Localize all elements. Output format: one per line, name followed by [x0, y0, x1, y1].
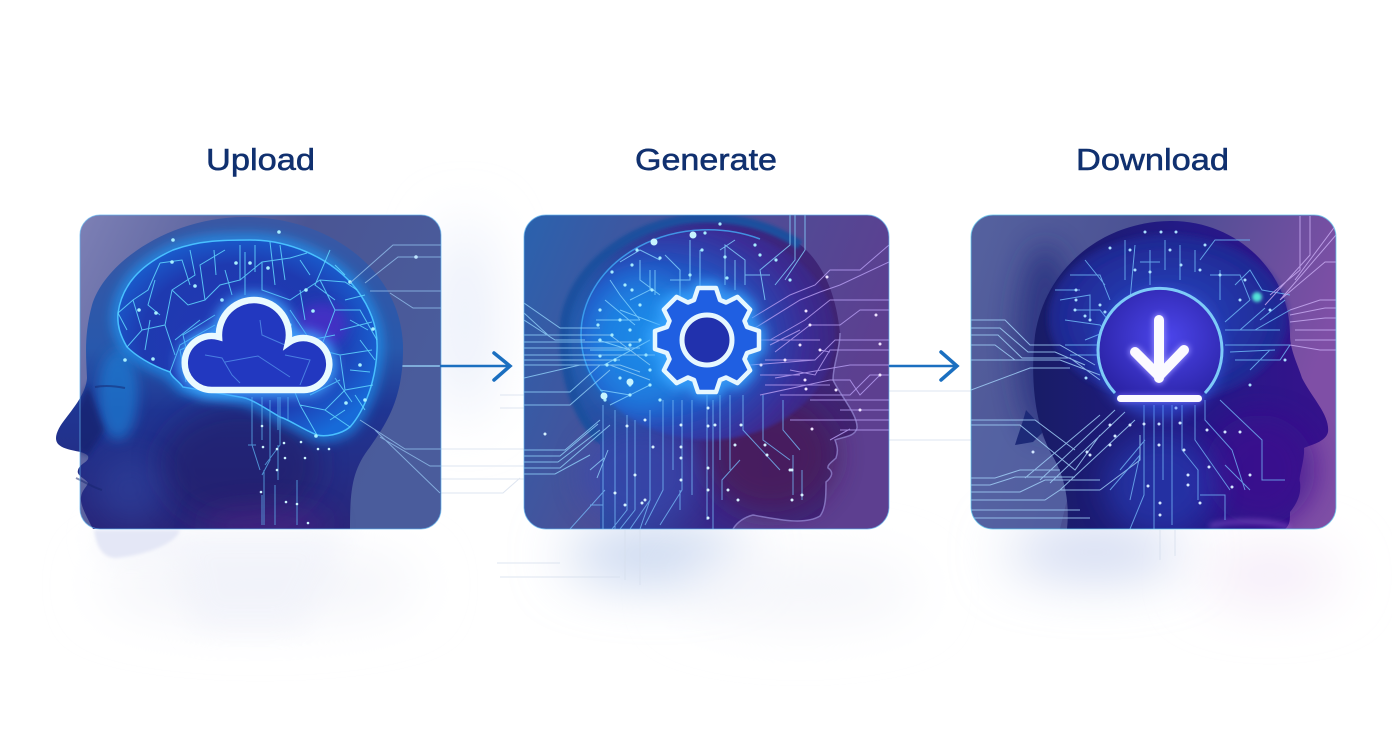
icon: gear — [655, 288, 759, 392]
circuit nodes: bright — [604, 235, 693, 396]
circuit nodes: brain — [598, 224, 790, 400]
panel rim — [971, 215, 1336, 529]
lower circuit traces — [570, 395, 802, 529]
brain circuit traces — [1055, 240, 1290, 370]
head shadow — [1017, 245, 1073, 435]
purple brain patch — [297, 303, 347, 347]
arrow: upload to generate — [403, 353, 510, 380]
left circuit traces — [971, 320, 1140, 518]
upload circuit lines to panel edge — [350, 245, 441, 493]
brain nodes — [125, 232, 373, 436]
head profile: generate — [564, 218, 857, 529]
circuit nodes: right — [761, 277, 880, 429]
brain glow — [118, 240, 377, 436]
node — [414, 255, 418, 259]
panel rim — [524, 215, 889, 529]
brain region — [1048, 234, 1288, 402]
title: Download: Download — [1076, 142, 1229, 177]
faded head reflection below Upload panel — [93, 529, 350, 630]
head rim — [564, 218, 800, 440]
brain — [118, 240, 377, 436]
neck nodes — [261, 426, 329, 523]
face features — [76, 386, 125, 490]
panel: upload — [56, 215, 441, 541]
back of neck — [971, 420, 1067, 529]
arrow: generate to download — [890, 352, 957, 380]
right circuit traces — [1265, 216, 1336, 350]
icon: cloud — [185, 300, 329, 390]
brain glow — [581, 230, 835, 440]
head profile: download — [1033, 221, 1328, 529]
panel rim — [80, 215, 441, 529]
icon: download — [1096, 288, 1224, 418]
upper circuit traces — [590, 215, 805, 405]
soft background glows — [100, 220, 1340, 620]
left circuit traces — [524, 303, 655, 478]
faint connector traces between panels — [441, 391, 1175, 585]
lower face shading — [160, 405, 320, 525]
circuit nodes: lower — [545, 408, 802, 518]
title: Generate: Generate — [635, 142, 777, 177]
brain rim — [581, 230, 760, 393]
brain circuit traces — [118, 242, 377, 435]
ear — [1015, 410, 1045, 445]
teal node — [1252, 292, 1262, 302]
panel: download — [971, 215, 1336, 535]
head profile: upload — [56, 217, 403, 529]
circuit nodes: lower — [1033, 408, 1250, 515]
right circuit traces — [750, 245, 889, 440]
title: Upload: Upload — [206, 142, 315, 177]
neck circuit traces — [248, 397, 297, 525]
face outline glow — [733, 333, 857, 529]
circuit nodes — [1075, 232, 1285, 385]
panel: generate — [524, 215, 889, 529]
lower circuit traces — [1110, 400, 1285, 529]
